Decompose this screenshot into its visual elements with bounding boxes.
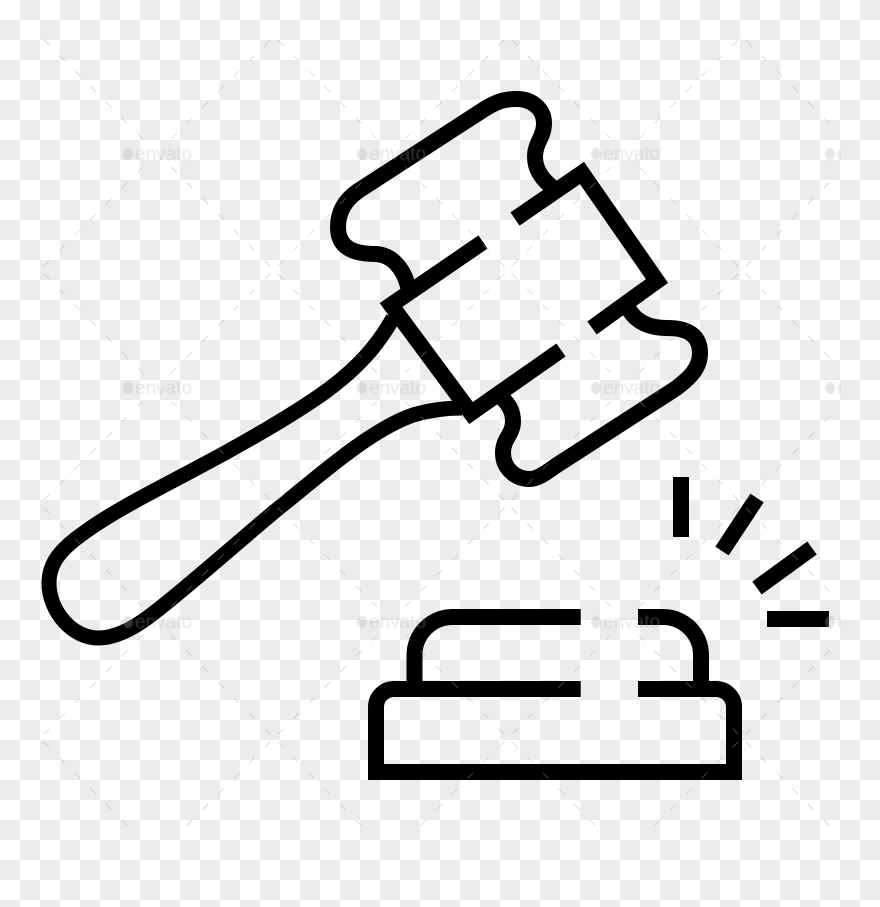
gavel head lower lobe [497,303,700,479]
envato watermarks: envato [135,612,192,633]
envato watermarks: envato [369,144,426,165]
envato watermarks: envato [603,144,660,165]
envato watermarks: e [837,612,848,633]
envato watermarks: envato [369,612,426,633]
gavel handle [49,318,462,638]
envato watermarks: envato [135,378,192,399]
block base [376,689,734,772]
envato watermarks: envato [369,378,426,399]
envato watermarks: envato [603,612,660,633]
envato watermarks: envato [135,144,192,165]
envato watermarks: e [837,144,848,165]
gavel head upper lobe [338,99,556,291]
watermark tick lattice [40,36,829,825]
block top left [414,617,581,689]
block top right [638,617,701,689]
envato watermarks: e [837,378,848,399]
gavel [49,99,700,638]
gavel head left band [391,242,561,413]
envato watermarks: envato [603,378,660,399]
sound block [376,617,734,772]
envato watermarks [123,144,848,633]
impact rays [681,477,829,619]
gavel head right band [515,173,657,328]
